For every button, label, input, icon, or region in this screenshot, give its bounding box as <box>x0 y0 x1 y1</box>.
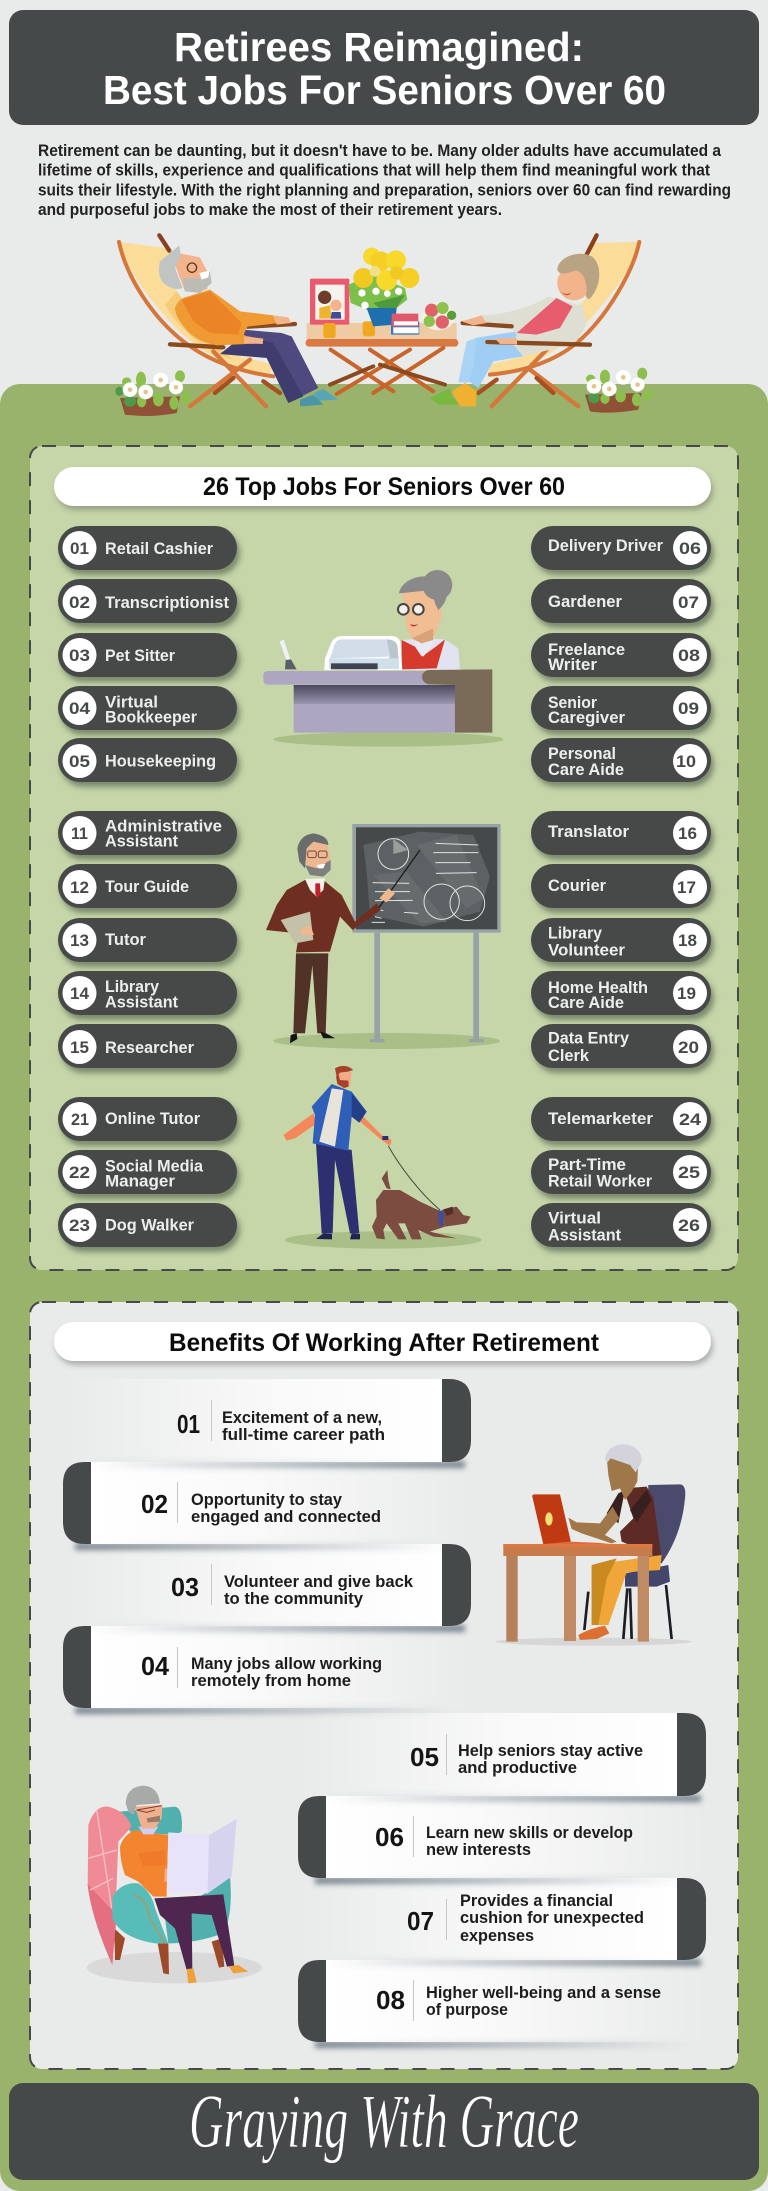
pill: 23 Dog Walker: 23 <box>69 1216 90 1235</box>
card: benefit 01: Excitement of a new, <box>222 1409 382 1427</box>
pill: 25 Part-Time Retail Worker <box>531 1150 711 1194</box>
card: benefit 04: 04 <box>141 1651 170 1681</box>
pill: 26 Virtual Assistant: Virtual <box>548 1210 601 1228</box>
heading: benefits: Benefits Of Working After Retirement <box>169 1329 600 1357</box>
pill: 08 Freelance Writer: 08 <box>678 646 700 665</box>
pill: 10 Personal Care Aide: Care Aide <box>548 761 624 779</box>
card: benefit 06: Learn new skills or develop <box>426 1824 633 1842</box>
pill: 02 Transcriptionist: Transcriptionist <box>105 594 229 612</box>
pill: 04 Virtual Bookkeeper: Virtual <box>105 694 158 712</box>
icon: newspaper <box>167 1819 237 1893</box>
pill: 04 Virtual Bookkeeper: Bookkeeper <box>105 708 198 726</box>
pill: 18 Library Volunteer: 18 <box>678 931 697 950</box>
card: benefit 08: 08 <box>376 1985 405 2015</box>
pill: 14 Library Assistant <box>58 971 237 1015</box>
footer: Graying With Grace <box>9 2080 759 2180</box>
pill: 11 Administrative Assistant: Administrative <box>105 818 222 836</box>
icon: woman in cardigan <box>430 254 599 406</box>
pill: 03 Pet Sitter: Pet Sitter <box>105 647 176 665</box>
icon: pen holder <box>280 639 297 669</box>
pill: 22 Social Media Manager: Social Media <box>105 1158 204 1176</box>
pill: 18 Library Volunteer: Volunteer <box>548 942 626 960</box>
heading: 26 top jobs: 26 Top Jobs For Seniors Over 60 <box>203 473 565 501</box>
pill: 11 Administrative Assistant: Assistant <box>105 832 178 850</box>
intro paragraph: lifetime of skills, experience and qualifications that will help them find meaningful work that <box>38 162 710 180</box>
icon: brown dog <box>372 1170 471 1239</box>
pill: 19 Home Health Care Aide <box>531 971 711 1015</box>
icon: person in maroon shirt <box>568 1444 662 1640</box>
pill: 22 Social Media Manager: Manager <box>105 1172 176 1190</box>
pill: 01 Retail Cashier <box>58 526 237 570</box>
pill: 15 Researcher: Researcher <box>105 1039 195 1057</box>
pill: 13 Tutor: 13 <box>70 931 89 950</box>
pill: 01 Retail Cashier: 01 <box>70 539 89 558</box>
pill: 09 Senior Caregiver: 09 <box>678 699 699 718</box>
icon: man with glasses and sweater <box>120 1786 248 1983</box>
icon: man in orange sweater <box>159 245 338 406</box>
pill: 08 Freelance Writer <box>531 633 711 677</box>
card: benefit 07: expenses <box>460 1927 534 1945</box>
pill: 24 Telemarketer: 24 <box>679 1110 702 1129</box>
icon: bearded man in brown suit <box>266 833 395 1043</box>
pill: 05 Housekeeping <box>58 738 237 782</box>
intro paragraph <box>38 142 731 219</box>
pill: 10 Personal Care Aide <box>531 738 711 782</box>
pill: 01 Retail Cashier: Retail Cashier <box>105 540 214 558</box>
pill: 26 Virtual Assistant: 26 <box>678 1216 700 1235</box>
title banner <box>9 10 759 125</box>
card: benefit 05 <box>298 1713 706 1802</box>
card: benefit 05: and productive <box>458 1759 577 1777</box>
pill: 16 Translator: 16 <box>678 824 697 843</box>
card: benefit 08 <box>298 1960 706 2048</box>
pill: 25 Part-Time Retail Worker: 25 <box>678 1163 700 1182</box>
icon: table with picture, flowers, books and fruit <box>306 248 458 394</box>
pill: 06 Delivery Driver: 06 <box>679 539 701 558</box>
card: benefit 08: of purpose <box>426 2001 508 2019</box>
pill: 12 Tour Guide <box>58 864 237 908</box>
pill: 24 Telemarketer <box>531 1097 711 1141</box>
pill: 18 Library Volunteer: Library <box>548 924 603 942</box>
illustration: typist at desk <box>263 570 503 747</box>
pill: 19 Home Health Care Aide: 19 <box>677 984 696 1003</box>
pill: 09 Senior Caregiver <box>531 686 711 730</box>
pill: 26 Virtual Assistant: Assistant <box>548 1226 621 1244</box>
card: benefit 06 <box>298 1796 706 1884</box>
pill: 13 Tutor <box>58 918 237 962</box>
pill: 17 Courier: Courier <box>548 877 607 895</box>
pill: 04 Virtual Bookkeeper <box>58 686 237 730</box>
card: benefit 03 <box>64 1544 471 1632</box>
illustration: senior at laptop <box>495 1444 692 1646</box>
pill: 17 Courier: 17 <box>677 878 696 897</box>
pill: 12 Tour Guide: Tour Guide <box>105 878 189 896</box>
card: benefit 07: 07 <box>407 1906 434 1936</box>
card: benefit 07: cushion for unexpected <box>460 1909 644 1927</box>
icon: typewriter <box>324 636 402 670</box>
pill: 16 Translator <box>531 811 711 855</box>
pill: 10 Personal Care Aide: Personal <box>548 745 616 763</box>
pill: 11 Administrative Assistant <box>58 811 237 855</box>
pill: 05 Housekeeping: Housekeeping <box>105 752 216 770</box>
pill: 20 Data Entry Clerk <box>531 1024 711 1068</box>
pill: 21 Online Tutor: 21 <box>71 1110 89 1129</box>
card: benefit 03: 03 <box>171 1572 199 1602</box>
card: benefit 04: Many jobs allow working <box>191 1655 382 1673</box>
pill: 09 Senior Caregiver: Senior <box>548 694 598 712</box>
intro paragraph: Retirement can be daunting, but it doesn't have to be. Many older adults have accumulated a <box>38 142 722 160</box>
card: benefit 02: Opportunity to stay <box>191 1491 343 1509</box>
pill: 14 Library Assistant: Assistant <box>105 994 178 1012</box>
icon: laptop <box>532 1494 610 1546</box>
card: benefit 02: 02 <box>141 1489 168 1519</box>
icon: desk <box>503 1544 652 1642</box>
pill: 03 Pet Sitter: 03 <box>69 646 90 665</box>
pill: 23 Dog Walker: Dog Walker <box>105 1216 195 1234</box>
card: benefit 01 <box>64 1379 471 1468</box>
pill: 25 Part-Time Retail Worker: Part-Time <box>548 1156 626 1174</box>
pill: 24 Telemarketer: Telemarketer <box>548 1110 654 1128</box>
title banner: Retirees Reimagined: <box>174 24 584 70</box>
icon: right flower pot <box>585 368 653 413</box>
pill: 03 Pet Sitter <box>58 633 237 677</box>
pill: 06 Delivery Driver <box>531 526 711 570</box>
icon: chalkboard <box>352 824 501 1042</box>
illustration: teacher at chalkboard <box>266 824 501 1049</box>
heading: benefits <box>54 1322 711 1361</box>
card: benefit 03: to the community <box>224 1590 364 1608</box>
pill: 07 Gardener: 07 <box>678 593 699 612</box>
icon: left chair <box>119 235 295 406</box>
pill: 11 Administrative Assistant: 11 <box>71 824 88 843</box>
pill: 20 Data Entry Clerk: Data Entry <box>548 1030 630 1048</box>
icon: leash <box>388 1146 440 1210</box>
pill: 19 Home Health Care Aide: Care Aide <box>548 994 624 1012</box>
card: benefit 04: remotely from home <box>191 1672 351 1690</box>
pill: 25 Part-Time Retail Worker: Retail Worker <box>548 1172 653 1190</box>
card: benefit 01: full-time career path <box>222 1426 385 1444</box>
pill: 14 Library Assistant: Library <box>105 978 160 996</box>
pill: 20 Data Entry Clerk: Clerk <box>548 1047 590 1065</box>
panel: benefits of working after retirement <box>30 1302 738 2069</box>
card: benefit 05: Help seniors stay active <box>458 1742 643 1760</box>
pill: 15 Researcher: 15 <box>70 1038 89 1057</box>
pill: 16 Translator: Translator <box>548 823 630 841</box>
icon: chair <box>584 1484 685 1639</box>
pill: 22 Social Media Manager: 22 <box>69 1163 90 1182</box>
pill: 13 Tutor: Tutor <box>105 931 147 949</box>
pill: 10 Personal Care Aide: 10 <box>676 752 696 771</box>
card: benefit 04 <box>63 1626 471 1714</box>
pill: 04 Virtual Bookkeeper: 04 <box>69 699 91 718</box>
pill: 02 Transcriptionist: 02 <box>69 593 90 612</box>
card: benefit 06: new interests <box>426 1841 531 1859</box>
icon: armchair <box>88 1807 231 1974</box>
pill: 18 Library Volunteer <box>531 918 711 962</box>
panel: 26 top jobs <box>30 446 738 1270</box>
icon: left flower pot <box>115 370 191 416</box>
pill: 08 Freelance Writer: Writer <box>548 656 598 674</box>
pill: 06 Delivery Driver: Delivery Driver <box>548 537 664 555</box>
heading: 26 top jobs <box>54 467 711 506</box>
pill: 20 Data Entry Clerk: 20 <box>678 1038 699 1057</box>
card: benefit 08: Higher well-being and a sense <box>426 1984 661 2002</box>
pill: 07 Gardener: Gardener <box>548 593 623 611</box>
card: benefit 05: 05 <box>410 1742 439 1772</box>
card: benefit 07 <box>298 1878 706 1966</box>
pill: 21 Online Tutor <box>58 1097 237 1141</box>
card: benefit 02 <box>63 1462 471 1550</box>
pill: 15 Researcher <box>58 1024 237 1068</box>
icon: woman with glasses <box>398 570 460 670</box>
pill: 12 Tour Guide: 12 <box>70 878 89 897</box>
icon: man in blue shirt <box>283 1066 392 1239</box>
title banner: Best Jobs For Seniors Over 60 <box>103 67 666 113</box>
card: benefit 03: Volunteer and give back <box>224 1573 414 1591</box>
card: benefit 06: 06 <box>375 1822 404 1852</box>
card: benefit 02: engaged and connected <box>191 1508 381 1526</box>
illustration: man walking dog <box>283 1066 482 1249</box>
pill: 02 Transcriptionist <box>58 579 237 623</box>
illustration: retired couple on lounge chairs <box>115 235 653 416</box>
pill: 26 Virtual Assistant <box>531 1203 711 1247</box>
pill: 09 Senior Caregiver: Caregiver <box>548 709 626 727</box>
pill: 08 Freelance Writer: Freelance <box>548 641 625 659</box>
illustration: senior reading newspaper in armchair <box>87 1786 262 1983</box>
icon: right chair <box>478 235 639 406</box>
intro paragraph: suits their lifestyle. With the right planning and preparation, seniors over 60 can find rewarding <box>38 182 731 200</box>
card: benefit 07: Provides a financial <box>460 1892 613 1910</box>
intro paragraph: and purposeful jobs to make the most of their retirement years. <box>38 201 502 219</box>
pill: 05 Housekeeping: 05 <box>69 752 90 771</box>
pill: 07 Gardener <box>531 579 711 623</box>
pill: 21 Online Tutor: Online Tutor <box>105 1110 201 1128</box>
pill: 23 Dog Walker <box>58 1203 237 1247</box>
icon: desk <box>263 669 492 733</box>
card: benefit 01: 01 <box>177 1409 200 1439</box>
pill: 19 Home Health Care Aide: Home Health <box>548 979 648 997</box>
pill: 17 Courier <box>531 864 711 908</box>
pill: 14 Library Assistant: 14 <box>70 984 90 1003</box>
pill: 22 Social Media Manager <box>58 1150 237 1194</box>
